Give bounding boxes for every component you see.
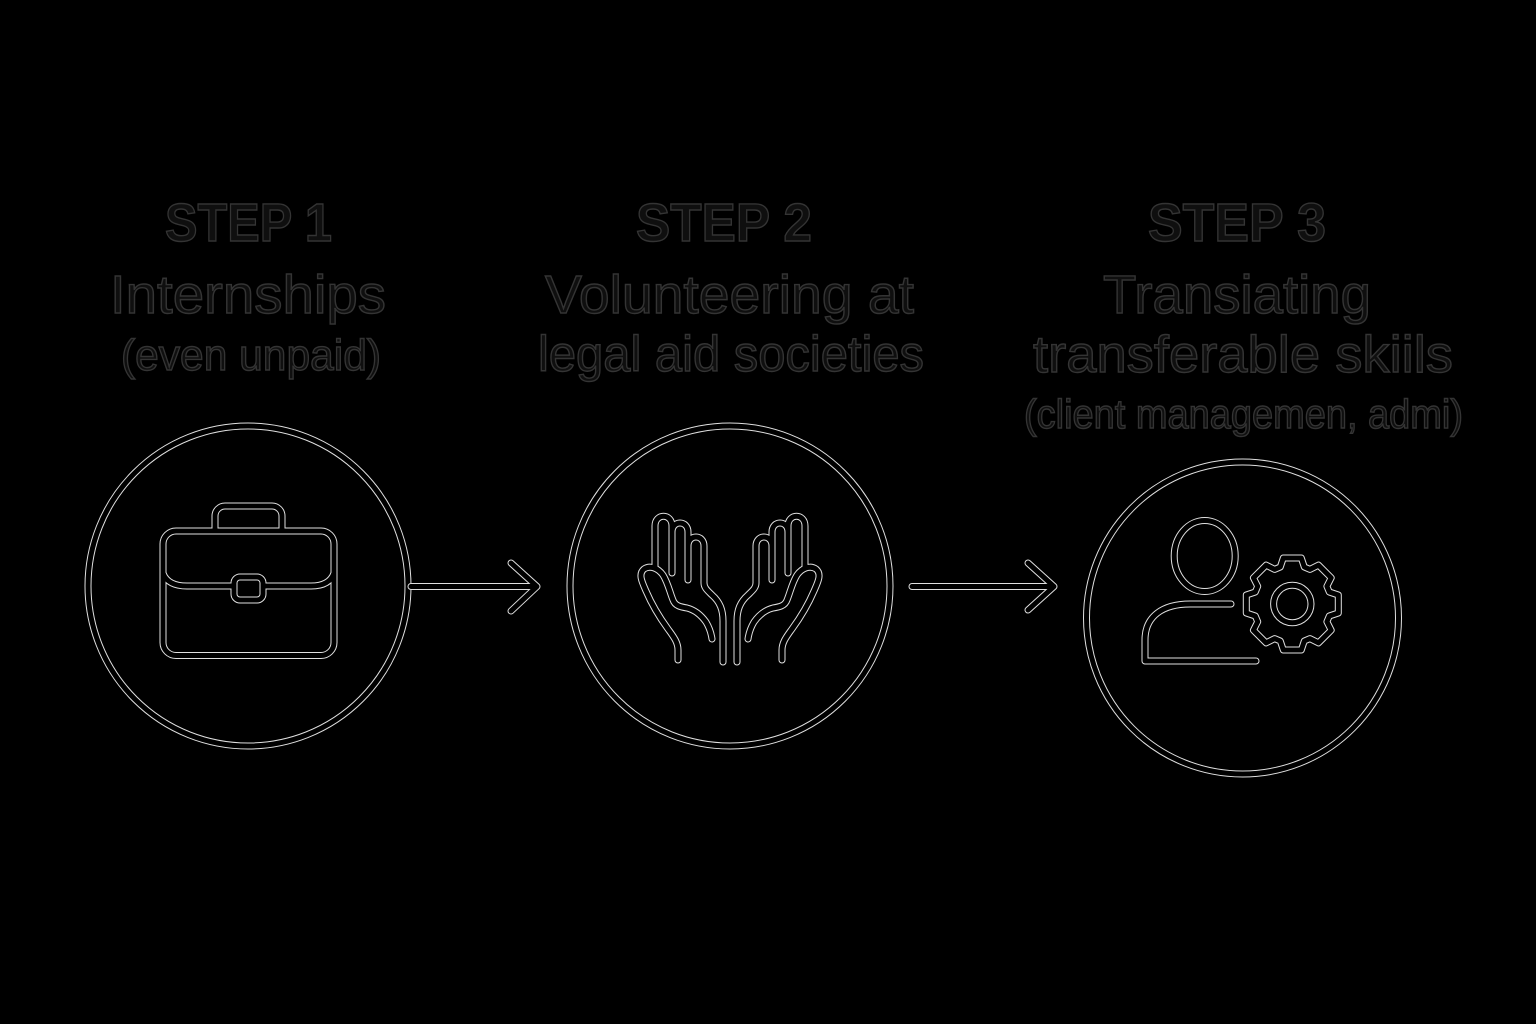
icon: briefcase (163, 506, 334, 656)
title: internships: Internships (110, 265, 386, 325)
circle: step 3 (1086, 462, 1398, 774)
title: legal aid societies: legal aid societies (538, 326, 924, 382)
title: translating: Transiating (1103, 265, 1371, 325)
circle: step 1 (88, 426, 408, 746)
arrow: step 2 to step 3 (912, 563, 1054, 610)
heading: step 3: STEP 3 (1148, 193, 1326, 253)
icon: open hands (641, 516, 819, 662)
note: even unpaid: (even unpaid) (121, 331, 381, 380)
panel: step 1 (88, 193, 408, 746)
circle: step 2 (570, 426, 890, 746)
heading: step 2: STEP 2 (636, 193, 812, 253)
icon: person with gear (1145, 520, 1338, 661)
title: transferable skills: transferable skiils (1033, 326, 1453, 384)
arrow: step 1 to step 2 (411, 563, 537, 611)
panel: step 2 (538, 193, 924, 746)
panel: step 3 (1024, 193, 1463, 774)
heading: step 1: STEP 1 (165, 193, 332, 253)
note: client management, admin: (client managemen, admi) (1024, 391, 1463, 437)
title: volunteering at: Volunteering at (545, 265, 914, 325)
